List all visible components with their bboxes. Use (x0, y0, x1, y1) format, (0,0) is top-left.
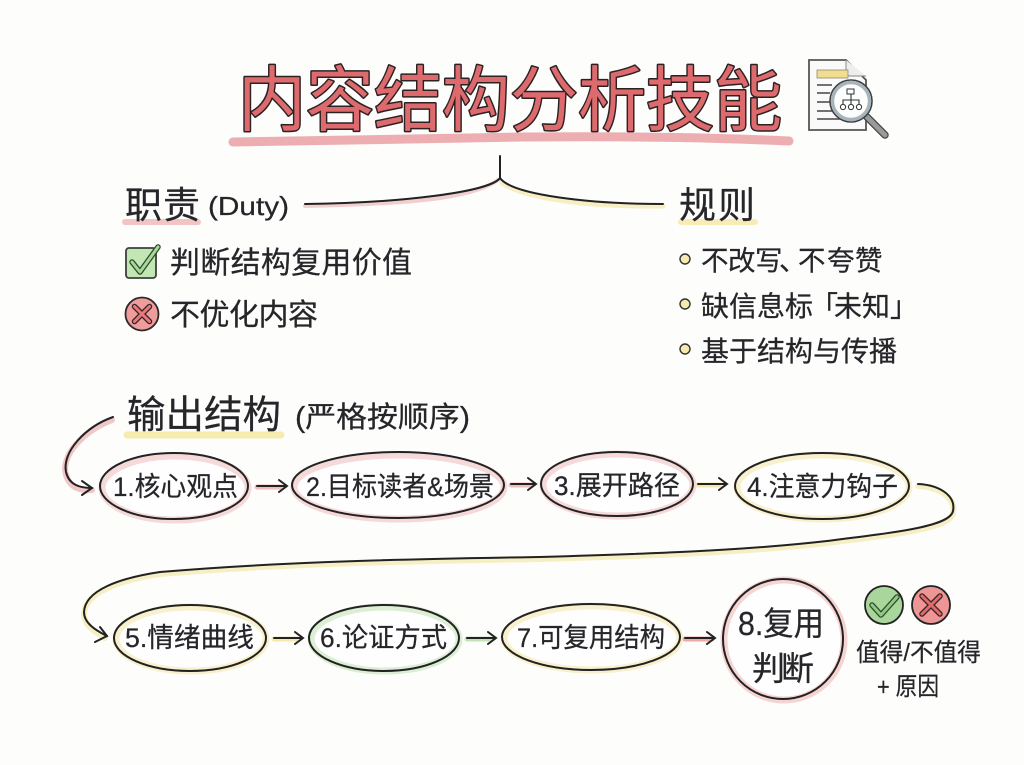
step 6 (309, 605, 459, 671)
step 2: 2.目标读者&场景 (306, 472, 494, 502)
text: plus reason: + 原因 (877, 673, 939, 701)
bullet: mark unknown: 缺信息标「未知」 (701, 291, 918, 322)
heading: duty (125, 185, 289, 226)
icon: green check (865, 586, 903, 624)
step 7 (502, 604, 680, 670)
step 3: 3.展开路径 (554, 471, 680, 501)
heading: rules: 规则 (679, 185, 755, 226)
step 2 (292, 452, 504, 519)
heading: output structure (127, 394, 470, 437)
arrow: 2 to 3 (511, 478, 536, 490)
heading: output structure: (严格按顺序) (295, 401, 470, 434)
arrow: 6 to 7 (467, 632, 496, 644)
bullet: structure and spread: 基于结构与传播 (701, 336, 897, 367)
step 6: 6.论证方式 (320, 623, 447, 653)
step 4: 4.注意力钩子 (747, 472, 898, 502)
step 1: 1.核心观点 (113, 472, 238, 502)
step 1 (100, 453, 248, 520)
icon: green check box (126, 247, 158, 278)
heading: duty: 职责 (125, 185, 200, 226)
panel: verdict (856, 586, 981, 701)
arrow: heading to step 1 (65, 417, 113, 495)
step 8: 8.复用 (738, 605, 824, 642)
arrow: 5 to 6 (274, 632, 303, 644)
text: not optimize: 不优化内容 (170, 299, 318, 332)
bracket connector: title to duty and rules (305, 156, 663, 206)
arrow: 7 to 8 (685, 632, 715, 644)
step 5: 5.情绪曲线 (125, 623, 254, 653)
arrow: 4 to 5 (84, 484, 953, 642)
title: 内容结构分析技能 (238, 62, 782, 141)
bullet: no rewrite: 不改写、不夸赞 (701, 245, 882, 276)
text: worth or not: 值得/不值得 (856, 639, 981, 667)
step 7: 7.可复用结构 (517, 623, 665, 653)
step 3 (541, 452, 693, 516)
arrow: 1 to 2 (257, 480, 287, 492)
arrow: 3 to 4 (698, 478, 727, 490)
icon: red cross (912, 586, 950, 624)
heading: output structure: 输出结构 (127, 394, 281, 437)
step 5 (114, 605, 266, 671)
step 4 (735, 453, 909, 519)
panel: duty (125, 185, 412, 332)
step 8 (723, 579, 844, 700)
icon: red cross circle (126, 298, 158, 330)
step 8: 判断 (752, 650, 814, 687)
panel: rules (679, 185, 918, 367)
text: judge structure: 判断结构复用价值 (170, 247, 412, 280)
heading: duty: (Duty) (208, 191, 289, 221)
icon: document with magnifier (809, 60, 885, 135)
